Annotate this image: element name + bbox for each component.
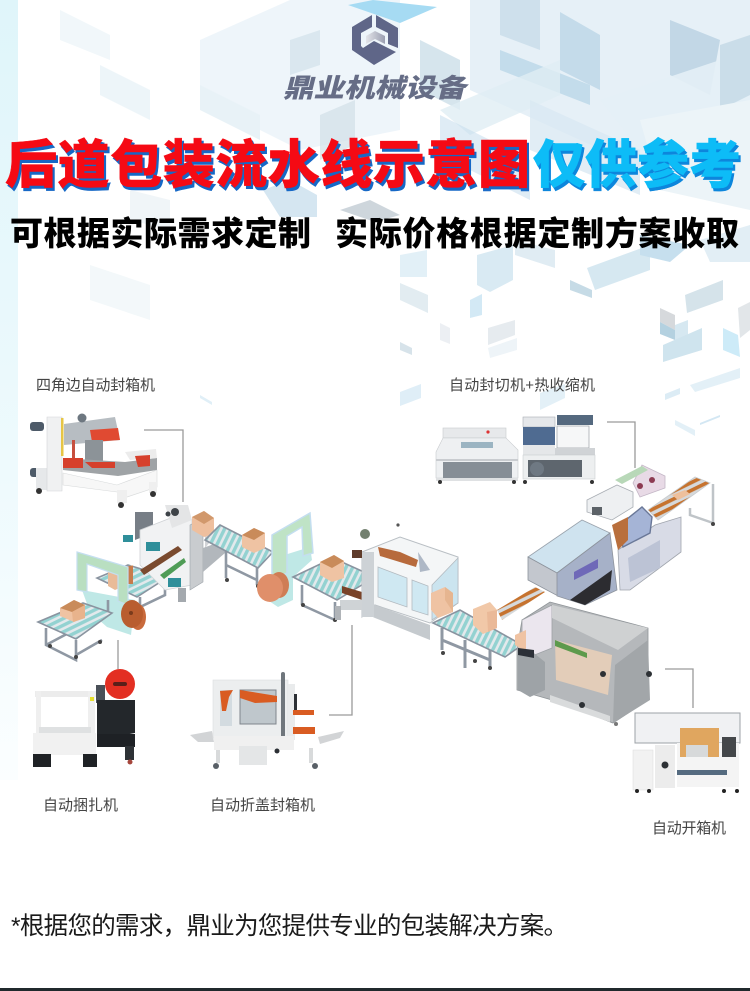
strapper base <box>263 547 312 607</box>
carton: open box at machine outlet <box>431 587 453 618</box>
footer note: *根据您的需求，鼎业为您提供专业的包装解决方案。 <box>11 907 568 942</box>
title: 仅供参考 <box>535 139 743 198</box>
roller conveyor D <box>302 585 335 620</box>
carton <box>320 555 344 582</box>
bottom rule <box>0 988 750 991</box>
strapping coil <box>105 669 135 699</box>
strapper arch <box>272 513 313 580</box>
carton <box>60 600 85 622</box>
conveyor frame legs <box>46 600 108 660</box>
logo wordmark: 鼎业机械设备 <box>282 73 473 103</box>
machine: four-corner sealer photo <box>30 414 157 508</box>
title: 仅供参考 <box>533 136 741 195</box>
background pattern: isometric blue panels <box>60 0 750 436</box>
carton <box>242 528 265 553</box>
machine: strapping machine photo <box>33 669 135 767</box>
open carton <box>473 602 497 634</box>
machine: central four-corner sealer in line <box>123 505 225 602</box>
conveyor: roller to erector <box>433 602 522 670</box>
label: case erector: 自动开箱机 <box>652 820 726 837</box>
strapping coil <box>121 600 146 630</box>
connector lines <box>118 422 693 715</box>
strapper arch <box>77 552 128 605</box>
logo <box>282 15 473 103</box>
label: flap-folding sealer: 自动折盖封箱机 <box>210 797 315 814</box>
machine: L-sealer and outfeed conveyor <box>587 465 715 590</box>
machine: case erector photo <box>633 713 740 793</box>
label: four-corner sealer: 四角边自动封箱机 <box>36 377 155 394</box>
subtitle <box>10 215 739 252</box>
icon: hexagon logo mark <box>352 15 398 65</box>
carton on central conveyor <box>192 511 214 537</box>
conveyor with strapper: centre line <box>205 513 375 622</box>
label: strapping machine: 自动捆扎机 <box>43 797 118 814</box>
machine: shrink tunnel in line <box>497 520 617 620</box>
label: shrink sealer: 自动封切机+热收缩机 <box>449 377 595 394</box>
machine: flap-folding sealer photo <box>190 672 344 769</box>
strapping coil <box>257 572 289 602</box>
title: 后道包装流水线示意图 <box>5 137 530 195</box>
machine: flap-folding sealer in line <box>335 523 458 640</box>
background pattern: left strip <box>0 0 18 780</box>
title: 后道包装流水线示意图 <box>7 140 532 198</box>
carton in strapper <box>108 565 133 590</box>
conveyor with strapper: bottom left line <box>38 552 168 660</box>
machine: shrink tunnel and L-sealer photo <box>436 415 595 484</box>
title <box>5 136 743 198</box>
subtitle: 实际价格根据定制方案收取 <box>335 215 739 252</box>
strapper base <box>82 590 135 635</box>
machine: case erector in line <box>515 602 652 726</box>
roller conveyor B <box>140 585 165 607</box>
subtitle: 可根据实际需求定制 <box>10 215 311 252</box>
